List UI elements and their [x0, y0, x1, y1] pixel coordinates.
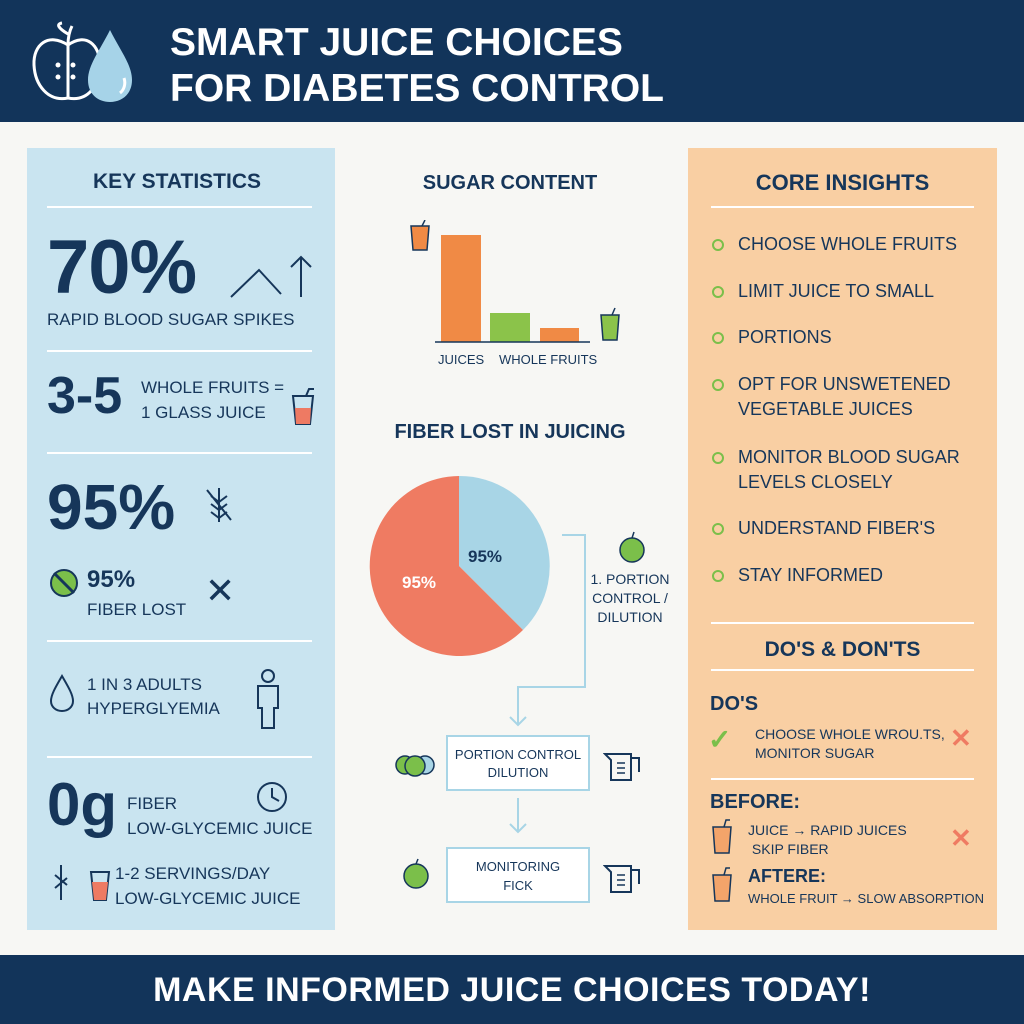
- before/after: ✕: [950, 823, 972, 853]
- pie chart: 95%: [402, 573, 436, 592]
- insight list: VEGETABLE JUICES: [738, 399, 913, 419]
- text: portion control step: 1. PORTION: [590, 571, 670, 587]
- stat 95%: 95%: [47, 471, 175, 543]
- stat 0g: LOW-GLYCEMIC JUICE: [127, 819, 312, 838]
- stat fiber lost: 95%: [87, 566, 135, 593]
- stat 0g: [47, 771, 312, 838]
- bar chart: sugar content: JUICES: [438, 352, 484, 367]
- before/after: AFTERE:: [748, 866, 826, 886]
- stat 0g: FIBER: [127, 794, 177, 813]
- heading: sugar content: SUGAR CONTENT: [423, 172, 597, 194]
- box: portion control: [446, 735, 590, 791]
- stat fiber lost: FIBER LOST: [87, 600, 186, 619]
- box: monitoring: FICK: [503, 878, 533, 893]
- before/after: SKIP FIBER: [752, 841, 829, 857]
- icon: fruits: [395, 755, 435, 777]
- before/after: BEFORE:: [710, 791, 800, 813]
- footer banner: [0, 955, 1024, 1024]
- stat servings: [54, 864, 300, 908]
- stat 70%: [47, 225, 312, 329]
- box: portion control: PORTION CONTROL: [455, 747, 581, 762]
- before/after: [710, 791, 984, 906]
- heading: dos and donts: DO'S & DON'TS: [765, 638, 920, 661]
- stat 3-5: 1 GLASS JUICE: [141, 403, 266, 422]
- stat 70%: RAPID BLOOD SUGAR SPIKES: [47, 310, 295, 329]
- box: portion control: DILUTION: [488, 765, 548, 780]
- before/after: WHOLE FRUIT → SLOW ABSORPTION: [748, 891, 984, 906]
- stat 1 in 3: [50, 669, 279, 729]
- flow connector arrow: [509, 534, 586, 834]
- icon: apple: [619, 532, 645, 563]
- stat servings: 1-2 SERVINGS/DAY: [115, 864, 270, 883]
- bar chart: sugar content: WHOLE FRUITS: [499, 352, 597, 367]
- stat 1 in 3: HYPERGLYEMIA: [87, 699, 220, 718]
- stat fiber lost: ✕: [205, 570, 235, 611]
- insight list: UNDERSTAND FIBER'S: [738, 518, 935, 538]
- insight list: [712, 234, 960, 585]
- insight list: MONITOR BLOOD SUGAR: [738, 447, 960, 467]
- dos: MONITOR SUGAR: [755, 745, 875, 761]
- box: monitoring: [446, 847, 590, 903]
- title: FOR DIABETES CONTROL: [170, 67, 664, 110]
- stat servings: LOW-GLYCEMIC JUICE: [115, 889, 300, 908]
- icon: measuring cup: [603, 753, 640, 781]
- insight list: LEVELS CLOSELY: [738, 472, 893, 492]
- title: [170, 21, 664, 110]
- text: portion control step: CONTROL /: [592, 590, 668, 606]
- stat 95%: [47, 471, 232, 543]
- insight list: OPT FOR UNSWETENED: [738, 374, 951, 394]
- stat 3-5: 3-5: [47, 367, 122, 425]
- dos: CHOOSE WHOLE WROU.TS,: [755, 726, 945, 742]
- insight list: LIMIT JUICE TO SMALL: [738, 281, 934, 301]
- stat 70%: 70%: [47, 225, 196, 310]
- pie chart: [370, 476, 550, 656]
- before/after: JUICE → RAPID JUICES: [748, 822, 907, 838]
- stat fiber lost: [50, 566, 235, 619]
- icon: apple 2: [403, 858, 429, 889]
- dos: ✓: [708, 724, 731, 755]
- icon: measuring cup 2: [603, 865, 640, 893]
- insight list: PORTIONS: [738, 327, 832, 347]
- insight list: CHOOSE WHOLE FRUITS: [738, 234, 957, 254]
- bar chart: sugar content: [410, 220, 620, 367]
- stat 3-5: [47, 367, 314, 425]
- dos: [708, 693, 972, 761]
- insight list: STAY INFORMED: [738, 565, 883, 585]
- heading: CORE INSIGHTS: [756, 170, 929, 195]
- text: portion control step: [590, 571, 670, 625]
- stat 0g: 0g: [47, 771, 117, 838]
- text: portion control step: DILUTION: [597, 609, 663, 625]
- panel: key statistics: [27, 148, 335, 930]
- title: SMART JUICE CHOICES: [170, 21, 623, 64]
- header: [0, 0, 1024, 122]
- icon: apple and drop: [32, 22, 132, 102]
- dos: ✕: [950, 723, 972, 753]
- stat 3-5: WHOLE FRUITS =: [141, 378, 284, 397]
- box: monitoring: MONITORING: [476, 859, 560, 874]
- footer banner: MAKE INFORMED JUICE CHOICES TODAY!: [153, 971, 871, 1009]
- dos: DO'S: [710, 693, 758, 715]
- heading: fiber lost: FIBER LOST IN JUICING: [394, 421, 626, 443]
- pie chart: 95%: [468, 547, 502, 566]
- panel: core insights: [688, 148, 997, 930]
- heading: KEY STATISTICS: [93, 170, 261, 193]
- stat 1 in 3: 1 IN 3 ADULTS: [87, 675, 202, 694]
